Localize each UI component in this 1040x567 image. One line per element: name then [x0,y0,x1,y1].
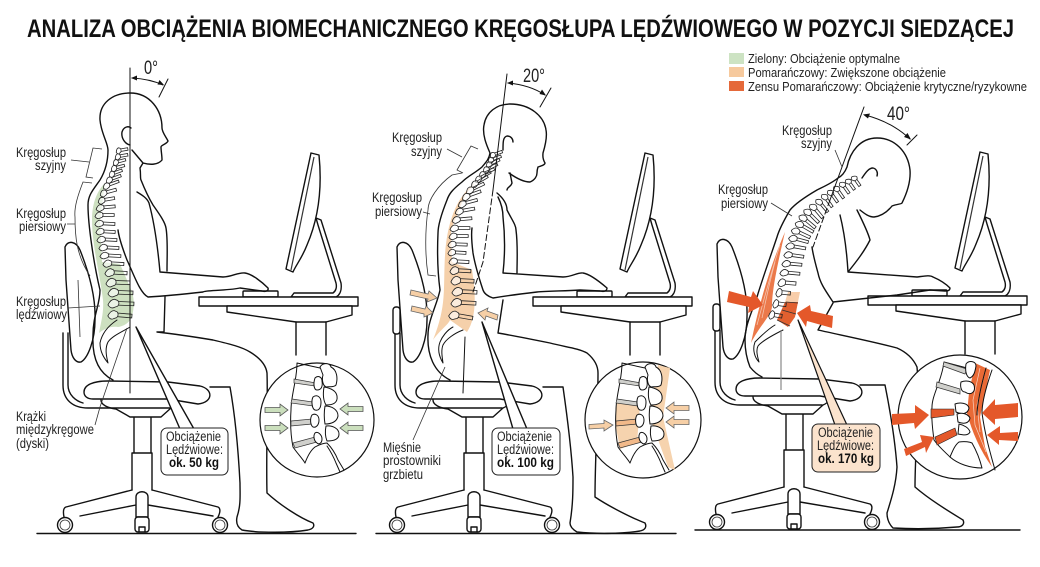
torso, thigh and leg [498,300,646,533]
tilt axis dashed [473,190,493,292]
label: thoracic: piersiowy [375,204,422,219]
angle label: 40° [887,104,910,125]
sacrum [439,327,463,363]
office chair [710,239,880,530]
label: lumbar [16,280,100,337]
legend: orange swatch [729,67,744,77]
callout: load 100 kg: ok. 100 kg [497,454,554,470]
legend [729,51,1027,94]
desk and monitor [868,152,1027,354]
plumb line [463,337,465,393]
label: cervical: szyjny [35,158,66,173]
label: discs [16,328,127,451]
panel: posture 40 degrees [695,104,1027,530]
panel: posture 20 degrees [372,66,701,534]
plumb line [129,68,131,393]
arrows: critical load arrows [727,291,833,328]
arrows: load arrows orange [410,290,498,320]
callout: load 100 kg [492,428,560,475]
label: thoracic: Kręgosłup [372,190,422,205]
human body outline [745,138,910,377]
label: discs: Krążki [16,409,46,424]
legend: orange label: Pomarańczowy: Zwiększone obciążenie [748,65,946,80]
wedge pointer [136,327,194,429]
arrows: red inset [892,399,1018,456]
arm and hand [118,192,268,297]
arrows: green inset [265,403,363,434]
label: erector muscles: Mięśnie [383,440,421,455]
label: cervical [392,130,478,173]
angle label: 20° [523,66,545,87]
highlighted spine region orange [433,183,475,340]
label: thoracic: Kręgosłup [718,182,768,197]
label: lumbar: lędźwiowy [16,307,67,322]
upper lumbar pale [785,292,800,302]
label: discs: (dyski) [16,436,49,451]
inset: lumbar detail red [892,355,1022,479]
callout: load 170 kg: ok. 170 kg [818,450,874,466]
lumbar disc lines [777,302,798,326]
label: thoracic: Kręgosłup [16,206,66,221]
arrows: orange inset [589,402,689,431]
callout: load 50 kg: Obciążenie [166,429,221,444]
angle label: 0° [144,58,158,79]
label: cervical: Kręgosłup [782,123,832,138]
office chair [58,242,228,532]
inset vertebra processes [955,362,976,435]
label: thoracic [372,173,462,276]
callout: load 170 kg: Lędźwiowe: [817,438,874,453]
floor line [37,532,356,534]
inset: lumbar detail green [260,363,374,477]
wedge pointer [798,320,847,425]
wedge pointer [482,322,527,429]
chest and arm [812,210,950,302]
label: cervical [782,123,842,167]
tilt axis line [493,74,507,190]
tilt axis line [830,107,864,200]
label: thoracic: piersiowy [721,196,768,211]
inset: lumbar detail orange [585,362,701,478]
label: cervical: szyjny [411,144,442,159]
legend: green swatch [729,53,744,64]
panel: posture 0 degrees [16,58,374,534]
torso, thigh and leg [818,303,964,529]
callout: load 170 kg: Obciążenie [818,425,873,440]
callout: load 100 kg: Lędźwiowe: [497,442,554,457]
callout: load 50 kg: Lędźwiowe: [166,442,223,457]
angle arc [863,114,917,145]
angle arc [131,76,168,97]
ear [862,168,877,178]
lumbar bodies red [777,302,798,327]
callout: load 100 kg: Obciążenie [497,429,552,444]
plumb line [780,330,782,390]
floor line [376,532,676,534]
legend: deep orange swatch [729,81,744,91]
label: cervical: szyjny [801,136,832,151]
label: cervical [16,145,102,178]
office chair [390,242,560,532]
sacrum [754,325,783,362]
desk and monitor [533,153,692,355]
chest and arm [472,173,607,298]
spine vertebrae [95,146,134,321]
ear [122,127,131,145]
human body outline [88,93,168,380]
legend: green label: Zielony: Obciążenie optymalne [748,51,900,66]
label: erector muscles [383,367,445,482]
erector muscle red [751,232,785,343]
angle arc [507,80,551,107]
spine vertebrae [448,149,503,323]
tilt axis dashed [813,200,830,247]
torso, thigh and leg [157,297,314,532]
ear [503,136,513,150]
sacrum [100,320,130,363]
label: lumbar: Kręgosłup [16,294,66,309]
human body outline [428,104,546,380]
spine vertebrae [768,174,862,321]
label: erector muscles: grzbietu [383,467,423,482]
muscle streaks [757,245,780,325]
callout: load 50 kg: ok. 50 kg [169,454,219,470]
label: cervical: Kręgosłup [16,145,66,160]
floor line [695,529,1020,531]
callout: load 170 kg [812,424,880,472]
label: thoracic [16,182,92,276]
highlighted spine region green [92,183,134,333]
label: thoracic: piersiowy [19,219,66,234]
label: thoracic [718,182,792,216]
label: cervical: Kręgosłup [392,130,442,145]
desk and monitor [199,153,358,355]
callout: load 50 kg [161,428,228,475]
label: discs: międzykręgowe [16,422,94,437]
label: erector muscles: prostowniki [383,453,441,468]
